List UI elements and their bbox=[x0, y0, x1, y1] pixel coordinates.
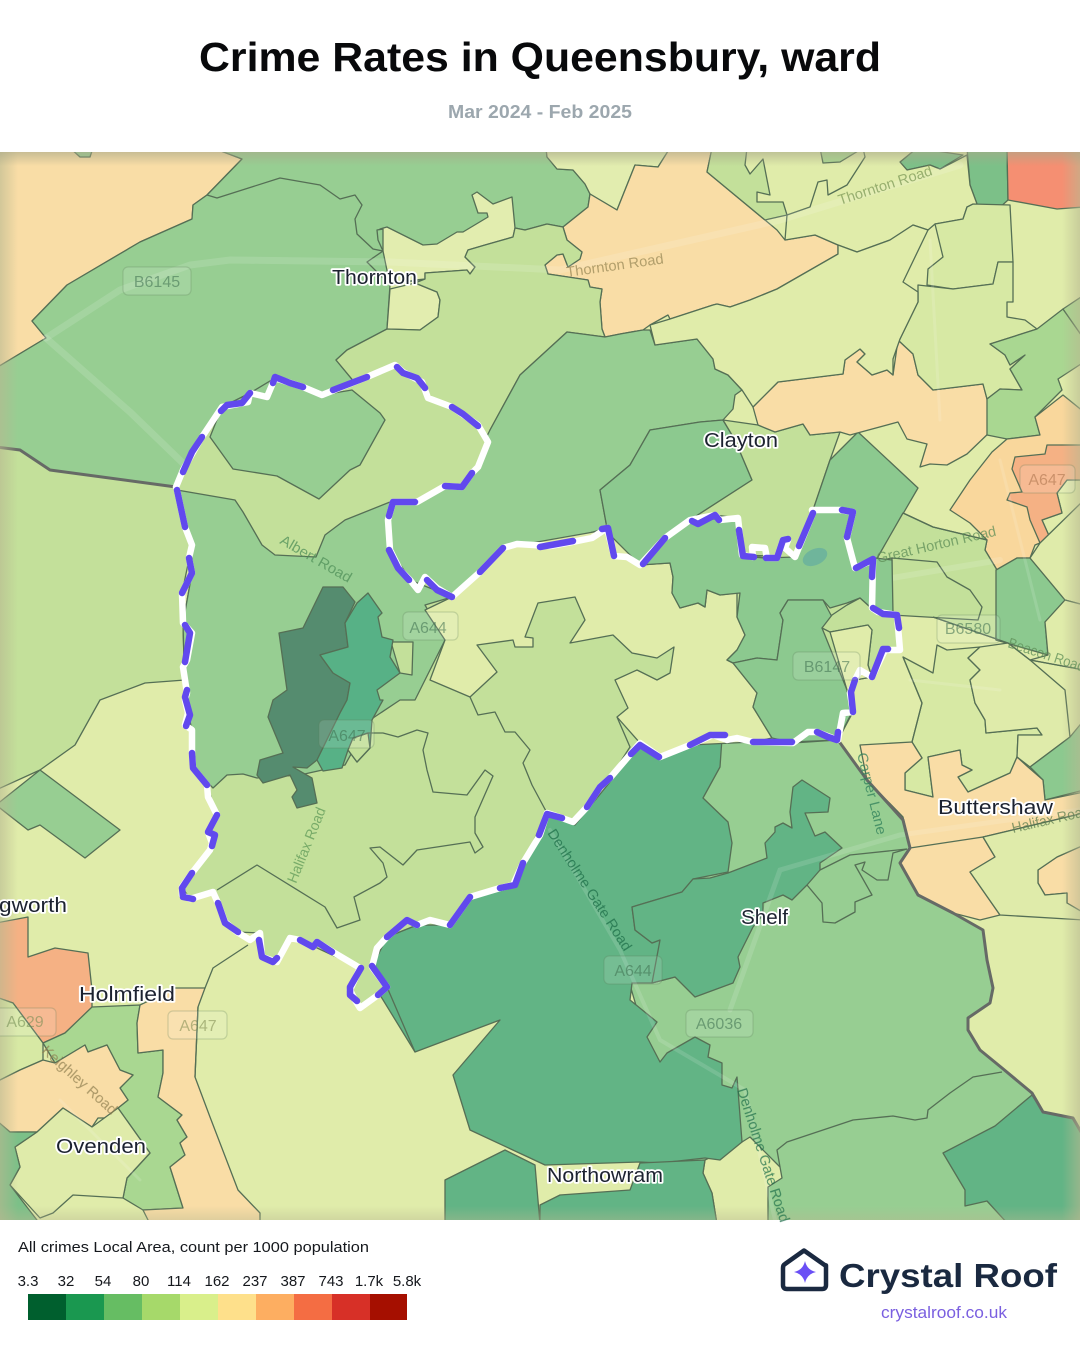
legend title: All crimes Local Area, count per 1000 population bbox=[18, 1239, 369, 1256]
legend values: 387 bbox=[280, 1273, 306, 1290]
legend values: 3.3 bbox=[18, 1273, 38, 1290]
choropleth map bbox=[0, 148, 1080, 1224]
road shield labels: A647 bbox=[179, 1018, 217, 1035]
road shields bbox=[0, 267, 1075, 1039]
place labels: gworth bbox=[0, 894, 67, 917]
main dark south area bbox=[372, 738, 742, 1165]
wedge by Denholme Gate Road bbox=[703, 1137, 782, 1224]
faint roads and settlements bbox=[46, 165, 1080, 1220]
place labels bbox=[0, 266, 1053, 1187]
ward boundary: purple dashes bbox=[177, 367, 899, 1001]
road shield labels: B6580 bbox=[945, 621, 991, 638]
road shield labels: A647 bbox=[328, 728, 366, 745]
road shield labels: A647 bbox=[1028, 472, 1066, 489]
legend values: 162 bbox=[204, 1273, 230, 1290]
edge fades bbox=[0, 152, 1080, 1220]
legend values: 237 bbox=[242, 1273, 268, 1290]
road labels: Carper Lane bbox=[853, 751, 889, 836]
road labels: Great Horton Road bbox=[875, 524, 998, 567]
west green area bbox=[177, 490, 452, 788]
south-east green area bbox=[632, 741, 1032, 1220]
road shield labels: A629 bbox=[6, 1014, 44, 1031]
road labels: Keighley Road bbox=[38, 1043, 120, 1119]
extra area lines bbox=[207, 178, 1080, 1167]
legend bbox=[18, 1239, 422, 1320]
road shield labels bbox=[6, 274, 1066, 1035]
place labels: Northowram bbox=[547, 1164, 663, 1187]
pond bbox=[802, 548, 828, 566]
central light area bbox=[425, 530, 772, 757]
legend values: 32 bbox=[58, 1273, 74, 1290]
title: Crime Rates in Queensbury, ward bbox=[199, 34, 881, 80]
road labels: Denholme Gate Road bbox=[544, 826, 634, 954]
place labels: Holmfield bbox=[79, 983, 175, 1006]
teal area bbox=[317, 593, 400, 771]
district boundary bbox=[0, 447, 1080, 1137]
lighter patch near A644 bbox=[391, 642, 413, 675]
road labels: Halifax Road bbox=[285, 805, 330, 885]
ward inner divisions bbox=[195, 730, 493, 1077]
small inlet by A647 bbox=[348, 733, 370, 762]
legend colour scale bbox=[28, 1294, 407, 1320]
south-east dark area bbox=[943, 1095, 1080, 1224]
Shelf area bbox=[632, 780, 842, 997]
logo: Crystal Roof bbox=[783, 1250, 1058, 1322]
road labels bbox=[38, 163, 1080, 1224]
central mid green area bbox=[470, 597, 674, 822]
road labels: Albert Road bbox=[277, 533, 354, 586]
road shield labels: A644 bbox=[409, 620, 447, 637]
icon: house with star bbox=[783, 1250, 826, 1289]
road labels: Thornton Road bbox=[565, 251, 665, 281]
legend values: 80 bbox=[133, 1273, 149, 1290]
ward boundary: white line bbox=[176, 365, 900, 1008]
outer neighbourhood regions bbox=[0, 148, 1080, 1224]
legend values: 743 bbox=[318, 1273, 344, 1290]
place labels: Buttershaw bbox=[938, 796, 1053, 819]
road labels: Thornton Road bbox=[836, 163, 934, 209]
legend values: 5.8k bbox=[393, 1273, 422, 1290]
road shield labels: A644 bbox=[614, 963, 652, 980]
legend values: 54 bbox=[95, 1273, 111, 1290]
place labels: Ovenden bbox=[56, 1135, 146, 1158]
place labels: Shelf bbox=[741, 906, 788, 929]
place labels: Thornton bbox=[332, 266, 417, 289]
legend values: 1.7k bbox=[355, 1273, 384, 1290]
road shield labels: B6145 bbox=[134, 274, 180, 291]
road shield labels: A6036 bbox=[696, 1016, 742, 1033]
legend values: 114 bbox=[167, 1273, 191, 1290]
place labels: Clayton bbox=[704, 429, 778, 452]
legend values bbox=[18, 1273, 422, 1290]
east green area bbox=[640, 512, 893, 663]
highest crime area, dark green bbox=[257, 587, 355, 808]
road labels: Denholme Gate Road bbox=[733, 1086, 792, 1224]
road shield labels: B6147 bbox=[804, 659, 850, 676]
ward area bbox=[176, 365, 900, 1008]
subtitle: Mar 2024 - Feb 2025 bbox=[448, 102, 632, 122]
website: crystalroof.co.uk bbox=[881, 1303, 1008, 1322]
wordmark: Crystal Roof bbox=[839, 1257, 1058, 1294]
